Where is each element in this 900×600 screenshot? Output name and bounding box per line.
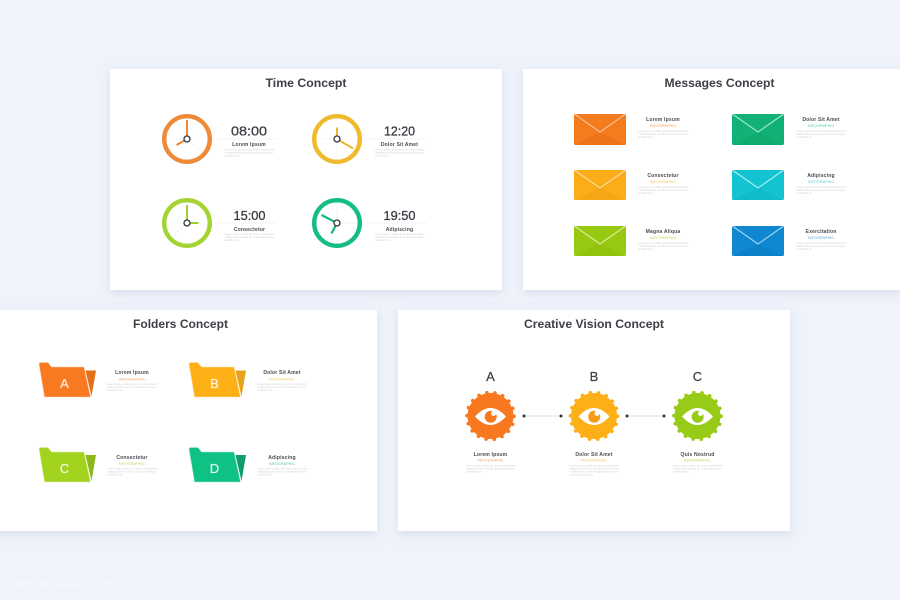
gear text: quis nostrud [672, 452, 723, 474]
envelope text: exercitation: INFOGRAPHIC [808, 236, 834, 240]
clock: 12:20 [314, 116, 360, 162]
folder text: lorem ipsum [107, 370, 157, 392]
gear text: lorem ipsum: Lorem ipsum dolor sit amet consectetur [465, 464, 516, 468]
envelope text: exercitation: Exercitation [806, 229, 836, 235]
folder text: lorem ipsum: incididunt ut [107, 388, 123, 392]
gear text: lorem ipsum: adipiscing elit sed do eiusmod tempor [466, 466, 515, 470]
folder text: consectetur: INFOGRAPHIC [119, 462, 145, 466]
folder text: adipiscing: adipiscing elit sed do eiusmod tempor [258, 470, 306, 474]
folder text: lorem ipsum: Lorem Ipsum [115, 370, 149, 376]
envelope text: dolor sit amet: INFOGRAPHIC [808, 124, 834, 128]
gear text: lorem ipsum: Lorem Ipsum [474, 452, 508, 458]
clock text: 15:00: Consectetur [234, 227, 265, 233]
folder text: dolor sit amet [257, 370, 307, 392]
clock text: 08:00: Lorem ipsum dolor sit amet consectetur [224, 148, 274, 152]
envelope text: exercitation: incididunt ut [796, 247, 812, 251]
envelope text: adipiscing: Adipiscing [807, 173, 835, 179]
envelope text: lorem ipsum: INFOGRAPHIC [650, 124, 676, 128]
envelope text: adipiscing: INFOGRAPHIC [808, 180, 834, 184]
folder: A [39, 362, 96, 397]
clock text: 12:20: incididunt ut [375, 154, 391, 158]
clock text: 12:20: Lorem ipsum dolor sit amet consectetur [374, 148, 425, 152]
clock text: 15:00: Lorem ipsum dolor sit amet consectetur [224, 232, 275, 236]
heading: creative vision concept: Creative Vision Concept [524, 317, 664, 331]
envelope text: consectetur: Consectetur [647, 173, 679, 179]
panel: messages concept [523, 69, 900, 290]
clock: 15:00 [164, 200, 210, 246]
folder text: dolor sit amet: INFOGRAPHIC [269, 378, 295, 382]
letter C: C [693, 369, 702, 384]
envelope text: exercitation: Lorem ipsum dolor sit amet consectetur [796, 241, 846, 245]
folder text: dolor sit amet: Dolor Sit Amet [263, 370, 301, 376]
envelope: blue [732, 226, 784, 256]
gear text: quis nostrud: adipiscing elit sed do eiusmod tempor [673, 466, 722, 470]
envelope text: consectetur: INFOGRAPHIC [650, 180, 676, 184]
letter A: A [486, 369, 495, 384]
envelope text: dolor sit amet [796, 117, 846, 139]
folder text: consectetur: incididunt ut [107, 472, 123, 476]
clock text: 08:00: 08:00 [231, 124, 267, 138]
folder text: adipiscing: Lorem ipsum dolor sit amet consectetur [257, 466, 307, 470]
heading: messages concept: Messages Concept [664, 76, 775, 90]
envelope text: dolor sit amet: incididunt ut [796, 135, 812, 139]
clock text: 08:00: incididunt ut [224, 154, 240, 158]
clock text: 12:20: 12:20 [384, 124, 415, 138]
panel: time concept [110, 69, 502, 290]
envelope text: magna aliqua [638, 229, 688, 251]
folder text: adipiscing [257, 455, 307, 476]
panel: folders concept [0, 310, 377, 531]
envelope text: lorem ipsum: incididunt ut [638, 135, 654, 139]
envelope text: consectetur: Lorem ipsum dolor sit amet consectetur [638, 185, 688, 189]
icon: eye gear B [570, 392, 618, 440]
clock: 19:50 [314, 200, 360, 246]
envelope text: adipiscing [796, 173, 846, 195]
folder text: consectetur: Consectetur [116, 455, 148, 461]
envelope text: magna aliqua: incididunt ut [638, 247, 654, 251]
envelope text: lorem ipsum: Lorem Ipsum [646, 117, 680, 123]
clock text: 08:00: Lorem Ipsum [232, 142, 266, 148]
clock text: 12:20: Dolor Sit Amet [381, 142, 418, 148]
gear text: dolor sit amet: Lorem ipsum dolor sit amet consectetur [569, 464, 619, 468]
clock text: 08:00 [217, 124, 277, 158]
clock text: 19:50: 19:50 [384, 208, 416, 223]
folder text: lorem ipsum: INFOGRAPHIC [119, 378, 145, 382]
clock: 08:00 [164, 116, 210, 162]
envelope text: magna aliqua: INFOGRAPHIC [650, 236, 676, 240]
panel: creative vision concept [398, 310, 790, 531]
gear text: dolor sit amet: minim veniam quis [569, 472, 593, 476]
gear text: dolor sit amet: ut labore et dolore magna aliqua enim [570, 470, 619, 474]
gear text: quis nostrud: Quis Nostrud [680, 452, 715, 458]
envelope: orange [574, 114, 626, 145]
folder text: consectetur: Lorem ipsum dolor sit amet consectetur [107, 466, 157, 470]
envelope text: exercitation [796, 229, 846, 251]
folder: A: A [60, 376, 69, 391]
folder text: dolor sit amet: incididunt ut [257, 388, 273, 392]
clock text: 12:20 [367, 124, 427, 158]
clock text: 08:00: adipiscing elit sed do eiusmod tempor [225, 150, 273, 154]
folder: B: B [210, 376, 219, 391]
folder: C: C [60, 461, 69, 476]
folder text: lorem ipsum: adipiscing elit sed do eiusmod tempor [108, 385, 156, 389]
envelope text: consectetur [638, 173, 688, 195]
envelope: lime [574, 226, 626, 256]
envelope text: exercitation: adipiscing elit sed do eiusmod tempor [797, 244, 845, 248]
clock text: 15:00: incididunt ut [224, 238, 240, 242]
envelope text: adipiscing: adipiscing elit sed do eiusmod tempor [797, 188, 845, 192]
envelope: yellow [574, 170, 626, 200]
envelope text: adipiscing: incididunt ut [796, 191, 812, 195]
envelope text: magna aliqua: Magna Aliqua [646, 229, 680, 235]
clock text: 15:00: adipiscing elit sed do eiusmod tempor [225, 235, 274, 239]
envelope text: magna aliqua: Lorem ipsum dolor sit amet consectetur [638, 241, 688, 245]
folder: D [189, 448, 246, 482]
envelope text: dolor sit amet: Dolor Sit Amet [802, 117, 840, 123]
envelope text: lorem ipsum [638, 117, 688, 139]
letter B: B [590, 369, 598, 384]
folder text: adipiscing: Adipiscing [268, 455, 296, 461]
folder: C [39, 448, 96, 482]
gear text: lorem ipsum: INFOGRAPHIC [477, 458, 504, 462]
clock text: 19:50: Lorem ipsum dolor sit amet consectetur [374, 232, 425, 236]
folder text: dolor sit amet: adipiscing elit sed do eiusmod tempor [258, 385, 306, 389]
envelope text: consectetur: adipiscing elit sed do eiusmod tempor [639, 188, 687, 192]
folder text: adipiscing: INFOGRAPHIC [269, 462, 295, 466]
envelope: cyan [732, 170, 784, 200]
folder text: dolor sit amet: Lorem ipsum dolor sit amet consectetur [257, 382, 307, 386]
heading: time concept: Time Concept [266, 76, 347, 90]
clock text: 19:50 [367, 208, 427, 242]
gear text: lorem ipsum [465, 452, 516, 474]
gear text: dolor sit amet: Dolor Sit Amet [575, 452, 613, 458]
gear text: dolor sit amet [569, 452, 619, 476]
clock text: 19:50: incididunt ut [375, 238, 391, 242]
clock text: 15:00 [217, 208, 277, 242]
envelope text: dolor sit amet: adipiscing elit sed do eiusmod tempor [797, 132, 845, 136]
envelope text: adipiscing: Lorem ipsum dolor sit amet consectetur [796, 185, 846, 189]
gear text: lorem ipsum: incididunt ut [466, 470, 482, 474]
folder text: consectetur: adipiscing elit sed do eiusmod tempor [108, 470, 156, 474]
watermark: www.25xt.com [13, 573, 122, 589]
envelope text: magna aliqua: adipiscing elit sed do eiusmod tempor [639, 244, 687, 248]
gear text: quis nostrud: Lorem ipsum dolor sit amet consectetur [672, 464, 723, 468]
envelope text: dolor sit amet: Lorem ipsum dolor sit amet consectetur [796, 129, 846, 133]
folder text: lorem ipsum: Lorem ipsum dolor sit amet consectetur [107, 382, 157, 386]
envelope: green [732, 114, 784, 145]
envelope text: consectetur: incididunt ut [638, 191, 654, 195]
connector A to B [522, 414, 562, 418]
gear text: quis nostrud: INFOGRAPHIC [684, 458, 711, 462]
clock text: 19:50: adipiscing elit sed do eiusmod tempor [375, 235, 424, 239]
icon: eye gear C [674, 392, 721, 440]
folder text: consectetur [107, 455, 157, 476]
clock text: 15:00: 15:00 [234, 208, 266, 223]
folder: D: D [210, 461, 219, 476]
clock text: 12:20: adipiscing elit sed do eiusmod tempor [375, 150, 424, 154]
icon: eye gear A [467, 392, 514, 440]
clock text: 19:50: Adipiscing [386, 227, 413, 233]
gear text: quis nostrud: incididunt ut [673, 470, 689, 474]
gear text: dolor sit amet: INFOGRAPHIC [581, 458, 607, 462]
gear text: dolor sit amet: adipiscing elit sed do eiusmod tempor [570, 466, 618, 470]
folder: B [189, 362, 246, 397]
envelope text: lorem ipsum: Lorem ipsum dolor sit amet consectetur [638, 129, 688, 133]
heading: folders concept: Folders Concept [133, 317, 228, 331]
connector B to C [626, 414, 666, 418]
envelope text: lorem ipsum: adipiscing elit sed do eiusmod tempor [639, 132, 687, 136]
folder text: adipiscing: incididunt ut [257, 472, 273, 476]
